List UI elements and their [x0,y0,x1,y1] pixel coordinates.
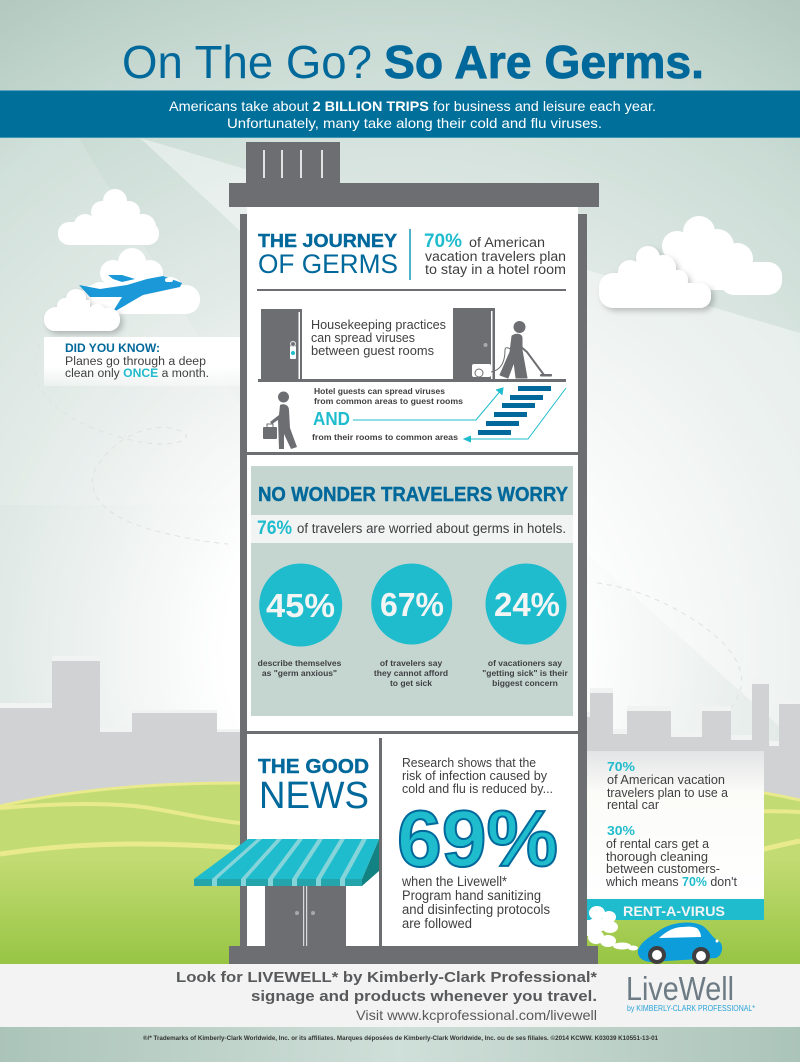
dashed flight path left [34,337,228,544]
hills left [0,783,240,964]
arrow up [353,388,503,420]
heading: the good news [258,756,369,817]
stat circle: 67 percent: 67% [380,586,444,623]
title: On The Go? [122,36,372,88]
text: when the livewell: are followed [402,916,472,931]
callout: did you know: DID YOU KNOW: [65,341,160,355]
icon: shop door [265,886,346,946]
footer panel [0,964,800,1027]
chimney [246,142,340,184]
footer panel: Visit www.kcprofessional.com/livewell [356,1007,597,1023]
stat circle: 67 percent: to get sick [390,678,432,688]
callout: did you know: Planes go through a deep [65,356,206,368]
cloud front of plane [44,289,120,331]
stat: 70 percent hotel: of American [469,235,545,250]
text: guests spread viruses [312,386,463,442]
skyline right [587,679,800,810]
icon: door with hanger [261,309,302,379]
clouds left top [58,189,159,245]
icon: exhaust smoke [587,906,638,950]
icon: stairs [478,386,551,435]
stat circle: 24 percent: 24% [494,586,560,623]
stat circle: 67 percent: they cannot afford [374,668,448,678]
stat circle: 24 percent: biggest concern [492,678,558,688]
skyline left [0,656,240,810]
panel: rent-a-virus: rental car [607,798,659,812]
logo: livewell: LiveWell [626,970,734,1007]
stat: 70 percent hotel [424,231,566,277]
heading: NO WONDER TRAVELERS WORRY [258,484,569,506]
stat circle: 24 percent: "getting sick" is their [482,668,568,678]
stat: 70 percent hotel: to stay in a hotel room [425,262,566,277]
stat circle: 45 percent: describe themselves [258,658,342,668]
title [122,36,704,88]
stat circle: 45 percent: 45% [266,587,335,624]
stat circle: 45 percent [258,564,342,678]
text: when the livewell [401,874,550,931]
text: research shows [402,755,553,796]
text: when the livewell: when the Livewell* [401,874,508,889]
panel: rent-a-virus: of rental cars get a [606,837,709,851]
stat circle: 45 percent: as "germ anxious" [262,668,337,678]
heading: the journey of germs: OF GERMS [258,249,398,279]
banner: Americans take about 2 BILLION TRIPS for business and leisure each year. [169,98,656,114]
panel: rent-a-virus [587,751,764,920]
icon: awning [194,839,379,886]
banner: Unfortunately, many take along their cold and flu viruses. [227,115,602,131]
bottom band with legal text: ®/* Trademarks of Kimberly-Clark Worldwide, Inc. or its affiliates. Marques déposées de Kimberly-Clark Worldwide, Inc. ou de ses filiales. ©2014 KCWW. K03039 K10551-13-01 [143,1035,659,1042]
text: guests spread viruses: from their rooms to common areas [312,432,458,442]
panel: no wonder travelers worry [251,466,573,716]
heading: the good news: THE GOOD [258,756,369,778]
text: when the livewell: Program hand sanitizing [402,888,541,903]
panel: rent-a-virus: RENT-A-VIRUS [623,903,725,919]
callout: did you know: clean only ONCE a month. [65,368,209,380]
dashed flight path right [597,583,742,708]
heading: the good news: NEWS [259,775,369,817]
text: guests spread viruses: from common areas to guest rooms [314,396,463,406]
text: research shows: risk of infection caused by [402,768,547,783]
stat circle: 67 percent [371,564,452,688]
stat circle: 67 percent: of travelers say [380,658,442,668]
stat: 70 percent hotel: 70% [424,231,462,252]
panel: rent-a-virus: 70% [607,759,635,774]
text: housekeeping: between guest rooms [311,343,434,358]
text: when the livewell: and disinfecting protocols [402,902,550,917]
text: research shows: Research shows that the [402,755,536,770]
icon: traveler with briefcase [263,392,297,449]
text: housekeeping [311,317,446,358]
cloud behind plane [80,248,200,314]
panel: rent-a-virus: which means 70% don't [605,875,738,889]
hills right [587,781,800,964]
text: and: AND [313,409,350,429]
stat circle: 24 percent [482,564,568,688]
panel: rent-a-virus: 30% [607,823,635,838]
text: housekeeping: can spread viruses [311,330,415,345]
heading: the journey of germs [258,231,398,279]
building [229,142,599,964]
panel: rent-a-virus: between customers- [606,862,720,876]
stat: 69 percent: 69% [397,794,558,883]
logo: livewell: by KIMBERLY-CLARK PROFESSIONAL* [627,1004,755,1013]
stat: 76 percent: 76% [257,518,292,539]
panel: no wonder travelers worry: of travelers are worried about germs in hotels. [297,521,566,536]
icon: blue car [638,923,722,965]
arrow down [464,388,566,442]
panel: rent-a-virus: thorough cleaning [606,850,708,864]
stat: 70 percent hotel: vacation travelers plan [425,249,566,264]
icon: door and cleaner with vacuum [453,308,552,379]
panel: rent-a-virus: travelers plan to use a [607,786,728,800]
text: guests spread viruses: Hotel guests can spread viruses [314,386,445,396]
heading: the journey of germs: THE JOURNEY [258,231,397,251]
title: So Are Germs. [384,36,704,88]
stat circle: 24 percent: of vacationers say [488,658,562,668]
icon: airplane [79,275,182,313]
callout: did you know [44,337,240,386]
bottom band with legal text [0,1027,800,1062]
panel: rent-a-virus: of American vacation [607,773,725,787]
footer panel: Look for LIVEWELL* by Kimberly-Clark Professional* [176,970,597,986]
banner [0,90,800,138]
footer panel: signage and products whenever you travel. [251,989,597,1005]
text: research shows: cold and flu is reduced by... [402,781,553,796]
clouds right [599,216,782,308]
text: housekeeping: Housekeeping practices [311,317,446,332]
